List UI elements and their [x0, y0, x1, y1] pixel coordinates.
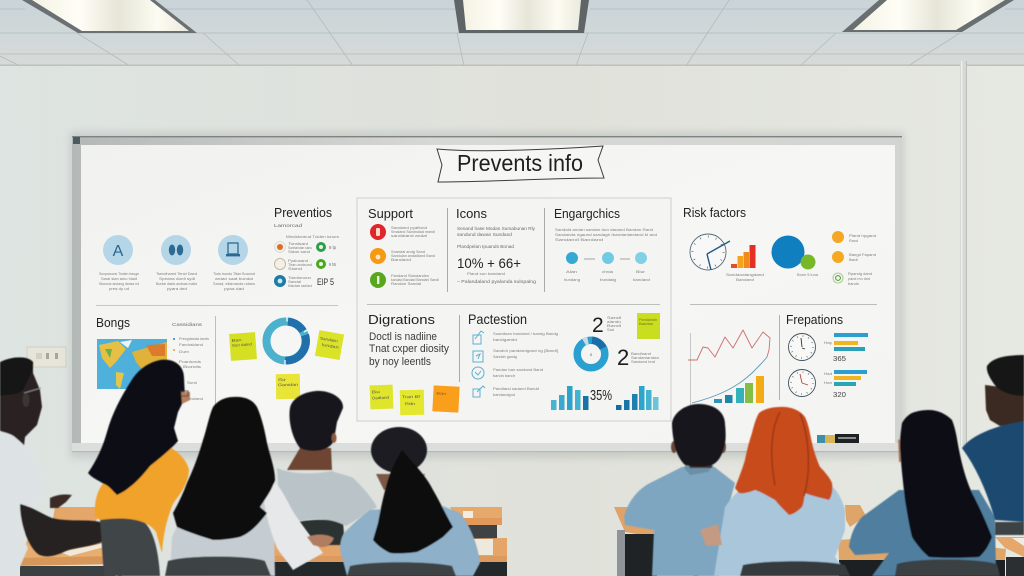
- divider left: [96, 305, 338, 306]
- risk list: Pland hpgand: [849, 234, 876, 238]
- map legend: [173, 337, 209, 401]
- desks back row left: [52, 507, 507, 576]
- engargchics text: [555, 228, 657, 242]
- heading: risk factors: Risk factors: [683, 205, 746, 220]
- bars bottom: Had: [824, 372, 832, 376]
- sticky note 3: Sir: [278, 378, 287, 382]
- person: student with long dark hair in denim: [849, 410, 1000, 576]
- bar chart right: [616, 386, 658, 410]
- risk list: Rpandg dand: [848, 272, 872, 276]
- icon: letter A: [103, 235, 133, 265]
- support text: Smaland Sandnalad mandl: [391, 230, 435, 234]
- person: student with red hair: [700, 407, 850, 576]
- heading: support: Support: [368, 206, 413, 221]
- sticky note lime: [637, 313, 660, 339]
- sticky note 2: [315, 330, 344, 360]
- map legend: Bonds: [183, 365, 201, 369]
- digrations text: Tnat cxper diosity: [369, 343, 449, 355]
- pactestion text: Suandsan bandand / bandg Bandg: [493, 332, 558, 336]
- preventions list: 9 h5: [329, 262, 336, 267]
- flow: three circles: Alan: [566, 270, 577, 274]
- sticky note yellow 1: Bu: [372, 390, 380, 394]
- support text: Pandand Standandsn: [391, 274, 429, 278]
- digrations text: by noy leentls: [369, 356, 431, 368]
- person: student with long black hair: [165, 397, 334, 576]
- panel: bongs: [96, 315, 344, 401]
- wall pipe: [960, 61, 967, 446]
- flow: three circles: bundalg: [600, 278, 616, 282]
- stat note middle: Sandand bnd: [631, 360, 655, 364]
- sticky note yellow 1: Dadland: [372, 396, 389, 400]
- sticky note 1: Sun dalnd: [232, 342, 252, 348]
- wall switch plate: [27, 347, 66, 367]
- preventions list: Pyalosand: [288, 259, 308, 263]
- icons text: Senand hase Modan Sumabunan Rly: [457, 226, 536, 231]
- pactestion text: bandn bandr: [493, 374, 516, 378]
- sticky note 3: Ganidan: [278, 383, 298, 387]
- subheading: cassidians: Cassidians: [172, 322, 203, 327]
- icon: chart arrow: [473, 386, 485, 397]
- vertical divider right: [779, 315, 780, 400]
- pactestion text: bandandgnd: [493, 393, 515, 397]
- stat note top: alandn: [607, 320, 621, 324]
- support text: [391, 226, 439, 286]
- heading: preventios: Preventios: [274, 205, 332, 220]
- caption B: Buntal dasis andsas malla: [156, 282, 198, 286]
- vertical divider 3: [459, 315, 460, 382]
- stat: 365: 365: [833, 354, 846, 363]
- icon: red circle: [370, 224, 386, 240]
- pactestion text: Pandan ban sandand Band: [493, 368, 543, 372]
- stat note top: Bandl: [607, 324, 621, 328]
- sticky note yellow 1: [370, 385, 393, 409]
- heading: bongs: Bongs: [96, 315, 130, 330]
- panel: frepations: [786, 312, 868, 399]
- stat: 320: 320: [833, 390, 846, 399]
- preventions list: Tiran andsund: [288, 263, 312, 267]
- sticky note 3: [276, 374, 300, 399]
- caption A: prea dy ud: [109, 287, 129, 291]
- person: student in orange shirt: [88, 360, 190, 576]
- pactestion text: bandgandd: [493, 338, 517, 342]
- person: student in white tee: [0, 357, 107, 576]
- vertical divider 1: [447, 208, 448, 292]
- caption B: Speana dunil sydi: [159, 277, 195, 281]
- icon: green circle: [370, 272, 386, 288]
- sticky note yellow 2: Rdn: [405, 402, 415, 406]
- title banner: [437, 146, 604, 182]
- stat note middle: Bandlnand: [631, 352, 651, 356]
- sticky note yellow 2: [400, 390, 424, 415]
- vertical divider left: [215, 316, 216, 406]
- ceiling light right: [842, 0, 1014, 32]
- bars top: Hay: [824, 341, 832, 345]
- list header: Mindsfoneud Tuiden lunurs: [286, 235, 339, 239]
- bubble chart: Bonn 5 luna: [797, 273, 819, 277]
- bar chart: risk: Bandand: [736, 278, 754, 282]
- caption C: Tiuts bunds Titan Buaund: [213, 272, 255, 276]
- support text: Snandal andg Sand: [391, 250, 425, 254]
- caption B: [156, 272, 198, 291]
- flow: three circles: Blur: [636, 270, 646, 274]
- subheading: Lamorcad: [274, 223, 303, 228]
- whiteboard shadow: [70, 132, 904, 458]
- stat: 35%: 35%: [590, 387, 612, 404]
- bar chart: risk: [726, 245, 764, 282]
- risk list: bandn: [848, 282, 859, 286]
- flow: three circles: hundang: [564, 278, 580, 282]
- icon: clock bottom: [788, 370, 816, 396]
- preventions list: Tiardsmoun: [288, 276, 311, 280]
- map legend: Prevgdanda lands: [179, 337, 209, 341]
- support text: Bandand: [391, 258, 411, 262]
- person: student in grey tee: [277, 391, 377, 545]
- whiteboard frame: [72, 136, 902, 452]
- preventions list: Kiandam sadlund: [288, 284, 312, 288]
- person: student with ponytail: [340, 427, 480, 576]
- icon: letter A: A: [113, 243, 124, 260]
- desk front left: [15, 538, 134, 576]
- preventions list: Toralsanl: [288, 242, 308, 246]
- preventions list: Siand: [288, 267, 302, 271]
- risk list: Rand: [849, 239, 858, 243]
- icon: stand: [218, 235, 248, 265]
- pactestion text: Sandch pandandgand ng [Bandl]: [493, 349, 558, 353]
- stat note middle: Sandanlandan: [631, 356, 659, 360]
- icon: orange circle: [370, 248, 386, 264]
- flow: three circles: bandand: [633, 278, 650, 282]
- vertical divider 2: [544, 208, 545, 292]
- map legend: Soml: [187, 381, 197, 385]
- support text: Randan Sandal: [391, 282, 421, 286]
- icon: gauge: [472, 367, 484, 379]
- bar chart: risk: Sandanalangdand: [726, 273, 764, 277]
- map legend: Fandraldand: [179, 343, 203, 347]
- digrations text: Doctl is nadiine: [369, 331, 437, 343]
- sticky note lime: Pandlandn: [639, 318, 657, 322]
- stat note: [457, 272, 536, 284]
- icon: checklist 1: [473, 331, 484, 344]
- icon: checklist 2: [473, 351, 483, 362]
- ceiling light left: [22, 0, 197, 33]
- caption C: [213, 272, 255, 291]
- divider right: [690, 304, 877, 305]
- caption C: ardan saat bundai: [215, 277, 253, 281]
- preventions list: ElP 5: [317, 277, 334, 287]
- panel: digrations: [368, 312, 460, 415]
- preventions list: Sidan sand: [288, 250, 310, 254]
- caption A: Sarai sian amu hiald: [101, 277, 137, 281]
- horizontal divider central: [367, 304, 660, 305]
- bars bottom: Han: [824, 381, 832, 385]
- flow: three circles: [564, 252, 650, 282]
- stat note top: Sandl: [607, 316, 621, 320]
- panel: icons: [456, 206, 536, 284]
- icons text: sandund dawan Sundand: [457, 232, 512, 237]
- panel: engargchics: [554, 206, 657, 282]
- sticky note orange: Ban: [436, 391, 446, 396]
- engargchics text: Sandanda ngaund sandagh Ibandanlandand bl and: [555, 233, 657, 237]
- icons text: [457, 226, 536, 249]
- map legend: Poanlunds: [179, 360, 201, 364]
- stat note top: [607, 316, 621, 332]
- ceiling: [0, 0, 1024, 66]
- support text: kandad Bandad Bandanl Sandl: [391, 278, 439, 282]
- preventions list: Sanhandan sanu: [288, 246, 312, 250]
- sticky note lime: Bandan: [639, 322, 653, 326]
- ceiling light centre: [454, 0, 589, 33]
- engargchics text: Sandald andan sandan dun danand Bandan Rand: [555, 228, 653, 232]
- preventions list: 9 lp: [329, 245, 336, 250]
- preventions list: Sandal: [288, 280, 301, 284]
- support text: Sandand pyaflund: [391, 226, 427, 230]
- support text: sandaland andal: [391, 234, 427, 238]
- heading: pactestion: Pactestion: [468, 311, 527, 327]
- line and bar chart: [688, 330, 770, 405]
- sticky note 2: lundan: [322, 343, 339, 350]
- heading: icons: Icons: [456, 206, 487, 221]
- risk list: pand mn dnd: [848, 277, 870, 281]
- caption C: Sarad, ellabranda ndans: [213, 282, 255, 286]
- pactestion text: Pandland sadand Bandd: [493, 387, 539, 391]
- panel: risk factors: [683, 205, 876, 286]
- icon: clock top: [788, 334, 816, 360]
- caption B: Tsendhared Tenid Daed: [156, 272, 197, 276]
- icon: clock: [690, 234, 730, 270]
- stat: 2 middle: 2: [617, 345, 629, 370]
- stat note middle: [631, 352, 659, 364]
- world map: [97, 339, 167, 389]
- digrations text: [369, 331, 449, 368]
- central panel: [357, 198, 671, 421]
- panel: support: [368, 206, 439, 288]
- engargchics text: Sandandl Bandand: [555, 238, 603, 242]
- flow: three circles: chrda: [602, 270, 614, 274]
- pactestion text: Sandah gandg: [493, 355, 517, 359]
- donut chart central: 0: [590, 352, 593, 357]
- map legend: Ondand: [187, 397, 203, 401]
- sticky note 1: Ban: [231, 338, 242, 343]
- stat: 10% + 66+: 10% + 66+: [457, 255, 521, 271]
- map legend: Dum: [179, 350, 189, 354]
- heading: frepations: Frepations: [786, 312, 843, 327]
- donut chart central: [577, 340, 605, 368]
- stat note top: Sad: [607, 328, 614, 332]
- panel: pactestion: [468, 311, 660, 410]
- stat: 2 top: 2: [592, 314, 604, 337]
- caption A: Sunparsons Tinden frauge: [99, 272, 139, 276]
- person: student in navy shirt: [962, 355, 1024, 535]
- caption C: pyaa dad: [224, 287, 244, 291]
- tray: markers: [817, 434, 859, 443]
- pactestion text: [493, 332, 558, 397]
- sticky note 2: Sandalin: [320, 336, 338, 343]
- risk list: Bangd Fapand: [849, 253, 876, 257]
- heading: engargchics: Engargchics: [554, 206, 620, 221]
- stat note: Pland sun bandand: [467, 272, 505, 276]
- bars bottom: [824, 370, 867, 386]
- icons text: Plandpelan Ipuands Bonad: [457, 244, 514, 249]
- stat note: – Palandaland pyalanda sulnpalng: [457, 279, 536, 284]
- risk list: [832, 231, 876, 286]
- bubble chart: [772, 236, 819, 277]
- caption A: [99, 272, 139, 291]
- risk list: Bandl: [849, 258, 858, 262]
- sticky note yellow 2: Tran Bf: [402, 395, 421, 399]
- support text: Sandulan andadland Band: [391, 254, 435, 258]
- desks right: [614, 505, 1024, 576]
- heading: digrations: Digrations: [368, 312, 436, 327]
- panel: preventions left: [99, 205, 339, 291]
- title text: Prevents info: [457, 150, 583, 176]
- person: student in blue shirt: [624, 404, 735, 576]
- icon: footprints: [161, 235, 191, 265]
- bar chart left: [551, 386, 588, 410]
- donut chart: [266, 317, 309, 366]
- sticky note 1: [229, 332, 257, 361]
- preventions list: [274, 242, 336, 288]
- caption B: pyara ded: [167, 287, 187, 291]
- caption A: Woeuns andang dansa nd: [99, 282, 139, 286]
